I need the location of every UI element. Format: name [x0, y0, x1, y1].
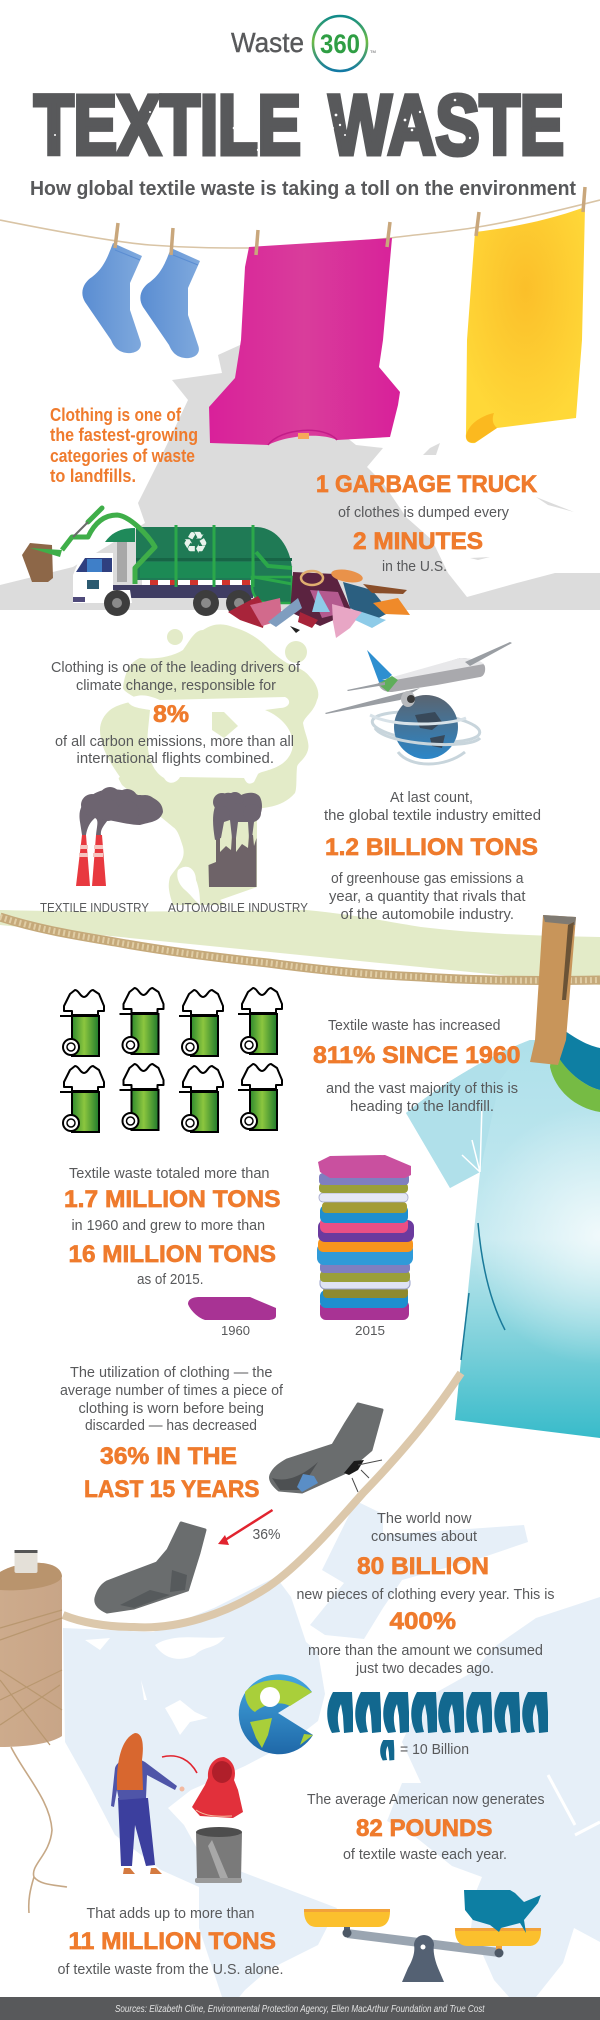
text block: garbage truck stat: of clothes is dumped every: [338, 504, 509, 521]
woman discarding clothes: [111, 1733, 184, 1874]
new sock: [96, 1523, 205, 1612]
text block: carbon emissions: 8%: [153, 701, 189, 728]
footer: sources bar: [0, 1997, 600, 2020]
icon: stack of folded clothes 2015: [317, 1155, 414, 1320]
text block: 80 billion: new pieces of clothing every year. This is: [296, 1586, 554, 1603]
text block: 11 million tons: That adds up to more than: [86, 1905, 254, 1922]
worn sock: [270, 1404, 382, 1492]
pink shirt: [209, 238, 400, 445]
text block: 82 pounds: of textile waste each year.: [343, 1846, 507, 1863]
text block: carbon emissions: of all carbon emissions, more than all: [55, 733, 294, 750]
text block: 1.2 billion tons: At last count,: [390, 789, 473, 806]
label: automobile industry: AUTOMOBILE INDUSTRY: [168, 900, 308, 915]
text block: million tons: Textile waste totaled more than: [69, 1165, 270, 1182]
text block: utilization: average number of times a piece of: [60, 1382, 284, 1399]
text block: 80 billion: The world now: [377, 1510, 472, 1527]
text block: 11 million tons: 11 MILLION TONS: [68, 1928, 276, 1955]
text block: 1.2 billion tons: 1.2 BILLION TONS: [325, 834, 538, 861]
logo: Waste360: TM: [370, 49, 376, 54]
clothespins on the line: [115, 187, 585, 255]
text block: million tons: [64, 1165, 280, 1288]
text block: 1.2 billion tons: year, a quantity that rivals that: [329, 888, 526, 905]
text block: utilization: clothing is worn before being: [78, 1400, 264, 1417]
text block: million tons: as of 2015.: [137, 1271, 204, 1288]
text block: utilization: 36% IN THE: [100, 1443, 237, 1470]
text block: 1.2 billion tons: of the automobile industry.: [340, 906, 514, 923]
text block: 11 million tons: of textile waste from the U.S. alone.: [58, 1961, 284, 1978]
thread rope: [63, 1373, 461, 1627]
text block: million tons: 16 MILLION TONS: [68, 1241, 276, 1268]
t-shirt on the line: [406, 1024, 600, 1438]
text block: carbon emissions: Clothing is one of the leading drivers of: [51, 659, 301, 676]
row of eight jeans: [327, 1692, 548, 1733]
pile of discarded clothes: [228, 567, 410, 638]
icon: metal trash can: [195, 1827, 242, 1883]
label: 1960: 1960: [221, 1323, 250, 1338]
thread spool: [0, 1550, 67, 1913]
garbage truck: [22, 508, 292, 616]
text block: million tons: 1.7 MILLION TONS: [64, 1186, 280, 1213]
clothesline: [0, 200, 600, 248]
orange pull quote: Clothing is one of: [50, 405, 182, 425]
garbage truck: ♻: [182, 526, 209, 561]
balance scale with USA: [304, 1890, 541, 1982]
title: TEXTILE: [34, 78, 301, 172]
white skull eye and mouth cut-outs behind text: [127, 695, 293, 905]
orange pull quote: [50, 405, 198, 486]
text block: carbon emissions: [51, 659, 301, 767]
icon: single folded cloth 1960: [188, 1297, 276, 1320]
text block: 1.2 billion tons: of greenhouse gas emissions a: [331, 870, 524, 887]
text block: utilization: The utilization of clothing — the: [70, 1364, 272, 1381]
icon: automobile factory: [208, 792, 262, 887]
text block: 811% since 1960: [313, 1017, 520, 1115]
background map: pale world continents: [63, 1501, 600, 2020]
shirt-in-bin icons: [60, 988, 282, 1132]
label: 36%: 36%: [252, 1526, 280, 1543]
blue socks: [82, 243, 200, 358]
text block: 80 billion: consumes about: [371, 1528, 478, 1545]
logo: Waste360: 360: [320, 29, 360, 59]
text block: 1.2 billion tons: the global textile industry emitted: [324, 807, 541, 824]
arrow: down 36%: [218, 1510, 272, 1545]
text block: 80 billion: just two decades ago.: [355, 1660, 494, 1677]
logo: Waste360: [231, 16, 376, 71]
text block: 811% since 1960: 811% SINCE 1960: [313, 1042, 520, 1069]
label: 2015: 2015: [355, 1323, 385, 1338]
rope: [0, 917, 600, 981]
text block: utilization: [60, 1364, 284, 1503]
text block: million tons: in 1960 and grew to more than: [72, 1217, 265, 1234]
text block: garbage truck stat: [316, 471, 538, 575]
yellow towel: [466, 207, 585, 443]
text block: garbage truck stat: 1 GARBAGE TRUCK: [316, 471, 538, 498]
legend: jeans = 10 billion: [380, 1740, 469, 1760]
text block: 1.2 billion tons: [324, 789, 541, 923]
text block: utilization: LAST 15 YEARS: [84, 1476, 260, 1503]
orange pull quote: categories of waste: [50, 446, 195, 466]
text block: 811% since 1960: and the vast majority of this is: [326, 1080, 518, 1097]
text block: carbon emissions: climate change, responsible for: [76, 677, 276, 694]
text block: 82 pounds: [307, 1791, 544, 1863]
icon: pacman earth: [239, 1674, 313, 1754]
text block: 80 billion: 80 BILLION: [357, 1553, 489, 1580]
subtitle: How global textile waste is taking a toll on the environment: [30, 178, 576, 200]
text block: utilization: discarded — has decreased: [85, 1417, 257, 1434]
large clothespin: [530, 915, 576, 1065]
text block: 82 pounds: The average American now generates: [307, 1791, 544, 1808]
orange pull quote: to landfills.: [50, 466, 136, 486]
logo: Waste360: Waste: [231, 27, 304, 58]
text block: 11 million tons: [58, 1905, 284, 1978]
text block: 80 billion: [296, 1510, 554, 1677]
text block: 80 billion: 400%: [390, 1608, 456, 1635]
airplane circling globe: [325, 642, 512, 764]
orange pull quote: the fastest-growing: [50, 425, 198, 445]
text block: 80 billion: more than the amount we consumed: [308, 1642, 543, 1659]
label: textile industry: TEXTILE INDUSTRY: [40, 900, 149, 915]
text block: 811% since 1960: heading to the landfill.: [350, 1098, 494, 1115]
icon: textile factory chimneys: [76, 787, 163, 886]
text block: garbage truck stat: in the U.S.: [382, 558, 447, 575]
footer: sources bar: Sources: Elizabeth Cline, Environmental Protection Agency, Ellen MacArthur Foundation and True Cost: [115, 2003, 485, 2015]
green skull smoke cloud: [0, 624, 600, 985]
legend: jeans = 10 billion: = 10 Billion: [400, 1741, 469, 1758]
icon: red hoodie: [192, 1757, 243, 1818]
arrow: into the bin: [162, 1756, 197, 1773]
text block: 82 pounds: 82 POUNDS: [356, 1815, 492, 1842]
grey landfill silhouette with birds: [0, 345, 600, 610]
text block: carbon emissions: international flights combined.: [76, 750, 274, 767]
title: [34, 78, 564, 172]
text block: 811% since 1960: Textile waste has increased: [328, 1017, 500, 1034]
text block: garbage truck stat: 2 MINUTES: [353, 528, 483, 555]
